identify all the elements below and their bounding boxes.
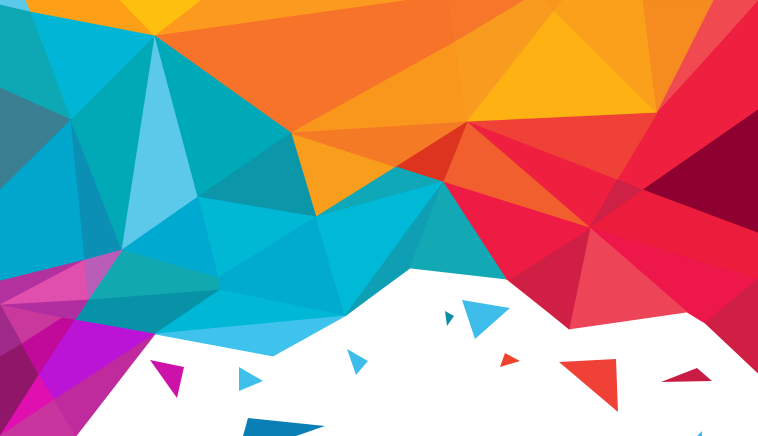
icon: light blue triangle, left (239, 367, 263, 391)
panel: magenta and purple facets, bottom left (0, 250, 155, 436)
icon: crimson triangle (661, 368, 712, 382)
icon: dark blue shard at bottom edge (243, 418, 325, 436)
panel: red and crimson facets, right side (396, 0, 758, 373)
icon: magenta triangle (150, 360, 184, 398)
icon: blue shard at bottom edge (697, 431, 702, 436)
icon: light blue triangle, centre (347, 349, 368, 375)
panel: teal and blue facets, centre and left (0, 0, 506, 356)
panel: orange and yellow facets, top centre (25, 0, 714, 217)
icon: large light blue triangle (462, 300, 510, 339)
floating triangles scattered over the white area (150, 300, 712, 436)
icon: orange-red triangle (559, 359, 618, 412)
icon: small teal triangle (445, 311, 454, 326)
icon: small red triangle (500, 353, 520, 367)
